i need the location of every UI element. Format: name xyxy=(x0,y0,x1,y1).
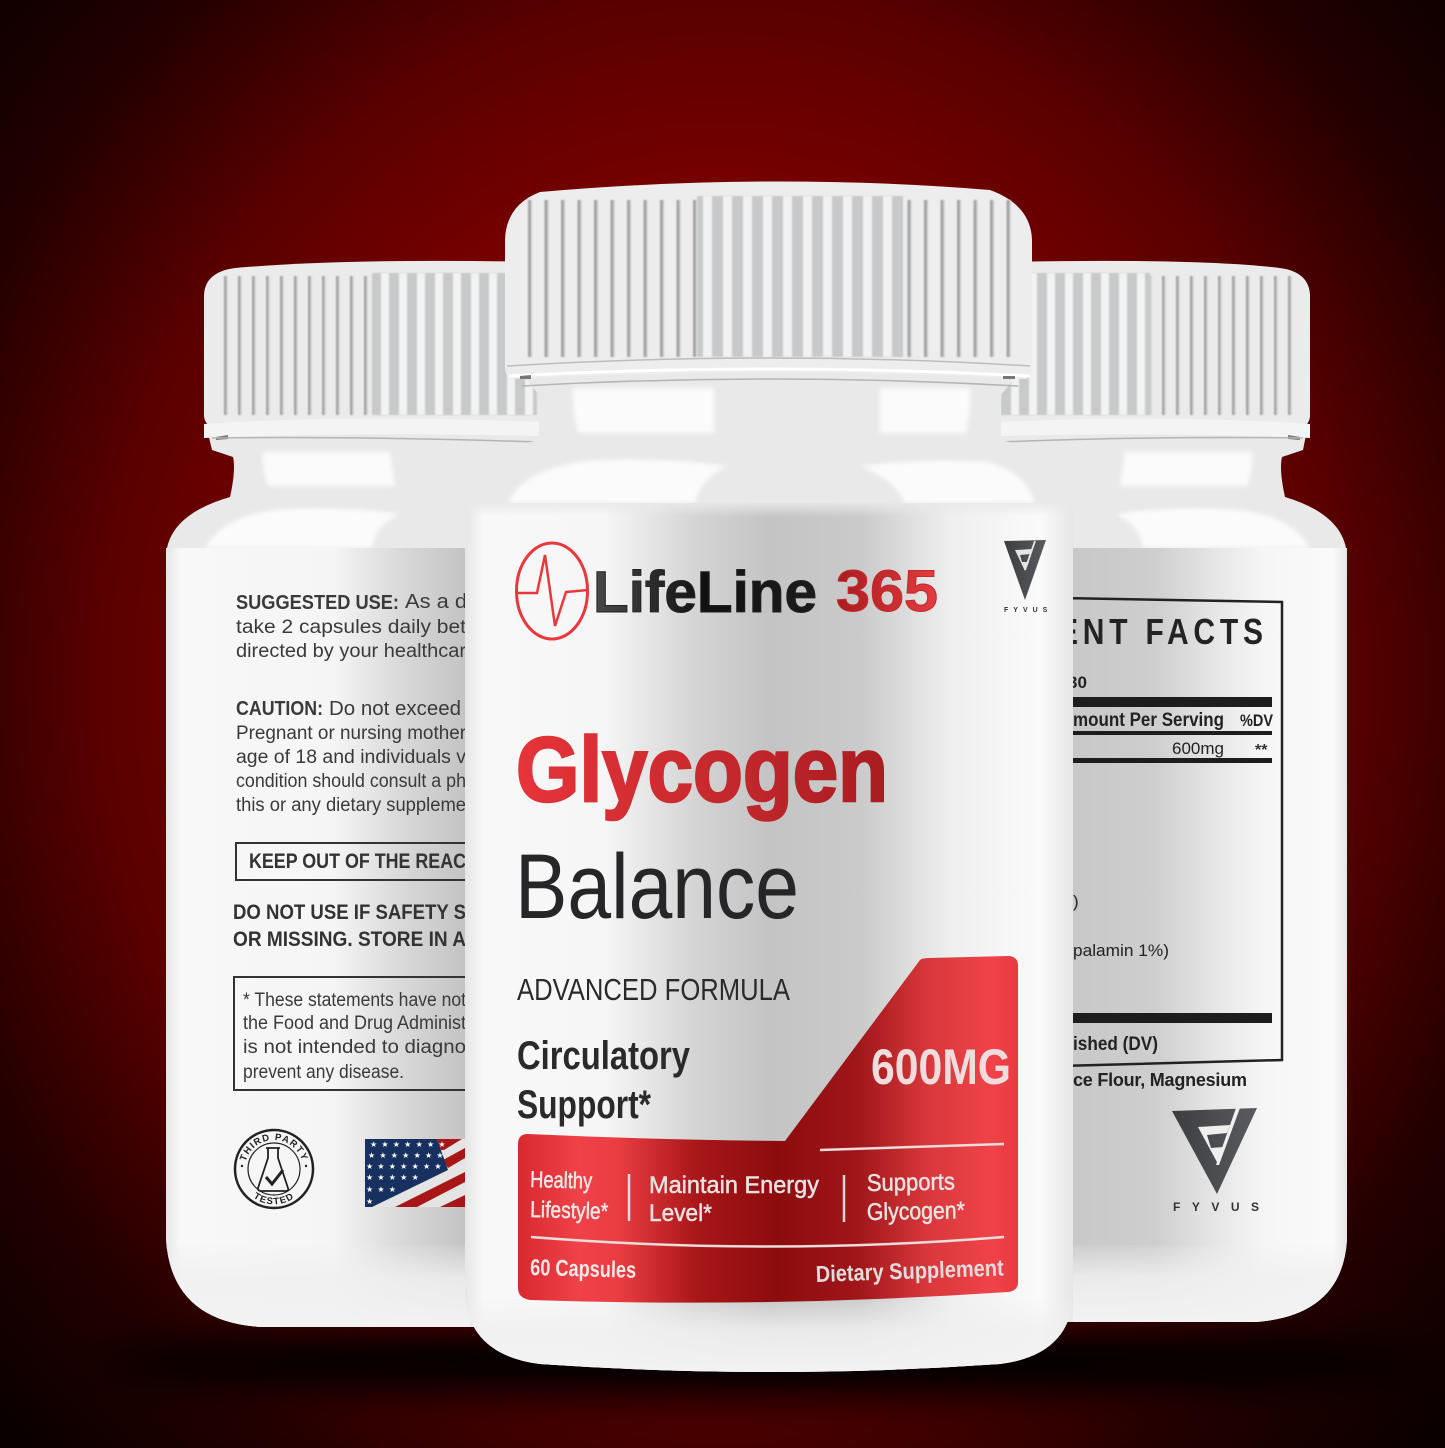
supplement facts panel: ** xyxy=(1255,742,1268,759)
60 capsules: 60 Capsules xyxy=(530,1254,637,1283)
advanced formula: ADVANCED FORMULA xyxy=(517,972,790,1007)
third party tested badge: TESTED xyxy=(255,1192,292,1204)
center bottle xyxy=(465,181,1073,1372)
FDA disclaimer box: the Food and Drug Administ xyxy=(243,1013,467,1034)
american flag: ★ xyxy=(366,1197,374,1206)
lifeline 365 logo: 365 xyxy=(836,559,938,624)
center label area xyxy=(465,503,1073,1372)
right bottle highlights xyxy=(1115,452,1310,548)
benefit: healthy lifestyle xyxy=(530,1166,609,1224)
third party tested badge: THIRD PARTY xyxy=(239,1134,308,1160)
caution text: Pregnant or nursing mother xyxy=(236,723,467,744)
supplement facts panel: ) xyxy=(1073,892,1079,911)
left bottle xyxy=(166,260,539,1327)
suggested use text: SUGGESTED USE: xyxy=(236,592,399,614)
benefit: maintain energy level xyxy=(649,1172,819,1227)
product name glycogen: Glycogen xyxy=(516,719,888,821)
circulatory support: Support* xyxy=(517,1083,651,1127)
left bottle highlights xyxy=(205,452,400,548)
benefit: supports glycogen: Glycogen* xyxy=(867,1197,965,1226)
center shoulder highlights xyxy=(508,460,1035,503)
supplement facts panel: 30 xyxy=(1068,673,1087,692)
american flag: ★ ★ ★ ★ ★ xyxy=(366,1173,420,1182)
fyvus logo right xyxy=(1172,1108,1271,1214)
FDA disclaimer box: prevent any disease. xyxy=(243,1062,404,1083)
caution text: condition should consult a ph xyxy=(236,771,466,792)
center top fade xyxy=(465,503,1073,517)
american flag xyxy=(365,1139,465,1207)
center neck highlights xyxy=(573,388,970,433)
american flag: ★ ★ ★ xyxy=(366,1185,397,1194)
supplement facts panel: palamin 1%) xyxy=(1073,941,1169,960)
caution text: CAUTION: xyxy=(236,698,323,720)
supplement facts panel: ce Flour, Magnesium xyxy=(1073,1070,1247,1090)
left bottle cap xyxy=(204,261,540,442)
keep out of reach box: KEEP OUT OF THE REAC xyxy=(249,850,466,873)
keep out of reach box xyxy=(236,843,470,880)
third party tested badge xyxy=(234,1128,314,1210)
FDA disclaimer box: * These statements have not xyxy=(243,990,467,1011)
center cap xyxy=(505,181,1032,386)
center bottle silhouette xyxy=(465,372,1073,1372)
caution text: Do not exceed xyxy=(329,698,461,720)
600mg: 600MG xyxy=(871,1039,1011,1095)
supplement facts panel: ished (DV) xyxy=(1073,1034,1158,1055)
circulatory support xyxy=(517,1034,691,1127)
suggested use text: As a d xyxy=(405,591,467,613)
fyvus logo right: FYVUS xyxy=(1173,1200,1271,1214)
american flag: ★ ★ ★ ★ ★ ★ ★ xyxy=(368,1151,445,1160)
heartbeat icon xyxy=(516,543,588,639)
american flag: ★ ★ ★ ★ ★ ★ ★ xyxy=(366,1162,443,1171)
circulatory support: Circulatory xyxy=(517,1034,691,1078)
product name balance: Balance xyxy=(515,836,799,938)
benefit: maintain energy level: Level* xyxy=(649,1200,712,1227)
supplement facts panel: mount Per Serving xyxy=(1073,710,1224,731)
right bottle label area xyxy=(1073,548,1347,1322)
right bottle xyxy=(1000,261,1347,1322)
left bottle silhouette xyxy=(166,425,540,1327)
FDA disclaimer box xyxy=(234,977,470,1090)
suggested use text: directed by your healthcar xyxy=(236,641,467,662)
benefit: healthy lifestyle: Lifestyle* xyxy=(530,1196,609,1224)
benefit: supports glycogen xyxy=(867,1168,965,1226)
safety warning: OR MISSING. STORE IN A xyxy=(233,928,466,951)
supplement facts panel: 600mg xyxy=(1172,739,1224,758)
benefit: healthy lifestyle: Healthy xyxy=(530,1166,593,1194)
center lower fade xyxy=(465,1296,1073,1372)
safety warning xyxy=(233,901,466,951)
lifeline 365 logo: LifeLine xyxy=(593,560,817,625)
red label panel xyxy=(518,956,1018,1303)
caution text: age of 18 and individuals v xyxy=(236,747,467,768)
suggested use text: take 2 capsules daily bet xyxy=(236,617,467,638)
suggested use text xyxy=(236,591,467,662)
dietary supplement: Dietary Supplement xyxy=(815,1254,1004,1287)
caution text xyxy=(236,698,467,816)
safety warning: DO NOT USE IF SAFETY S xyxy=(233,901,466,924)
right bottle lower fade xyxy=(1073,1240,1347,1322)
supplement facts panel: %DV xyxy=(1240,711,1274,730)
caution text: this or any dietary suppleme xyxy=(236,795,466,816)
fyvus logo center: FYVUS xyxy=(1004,607,1052,614)
american flag: ★ ★ ★ ★ ★ ★ ★ xyxy=(370,1140,447,1149)
right bottle cap xyxy=(1000,261,1310,442)
supplement facts panel xyxy=(1058,598,1282,1090)
left bottle lower fade xyxy=(166,1240,470,1327)
right bottle silhouette xyxy=(1000,425,1347,1322)
benefit: maintain energy level: Maintain Energy xyxy=(649,1172,819,1199)
supplement facts panel: ENT FACTS xyxy=(1058,612,1268,653)
lifeline 365 logo xyxy=(516,543,938,639)
benefit: supports glycogen: Supports xyxy=(867,1168,955,1197)
FDA disclaimer box: is not intended to diagno xyxy=(243,1037,466,1058)
fyvus logo center xyxy=(1004,540,1052,614)
left bottle label area xyxy=(166,548,470,1327)
